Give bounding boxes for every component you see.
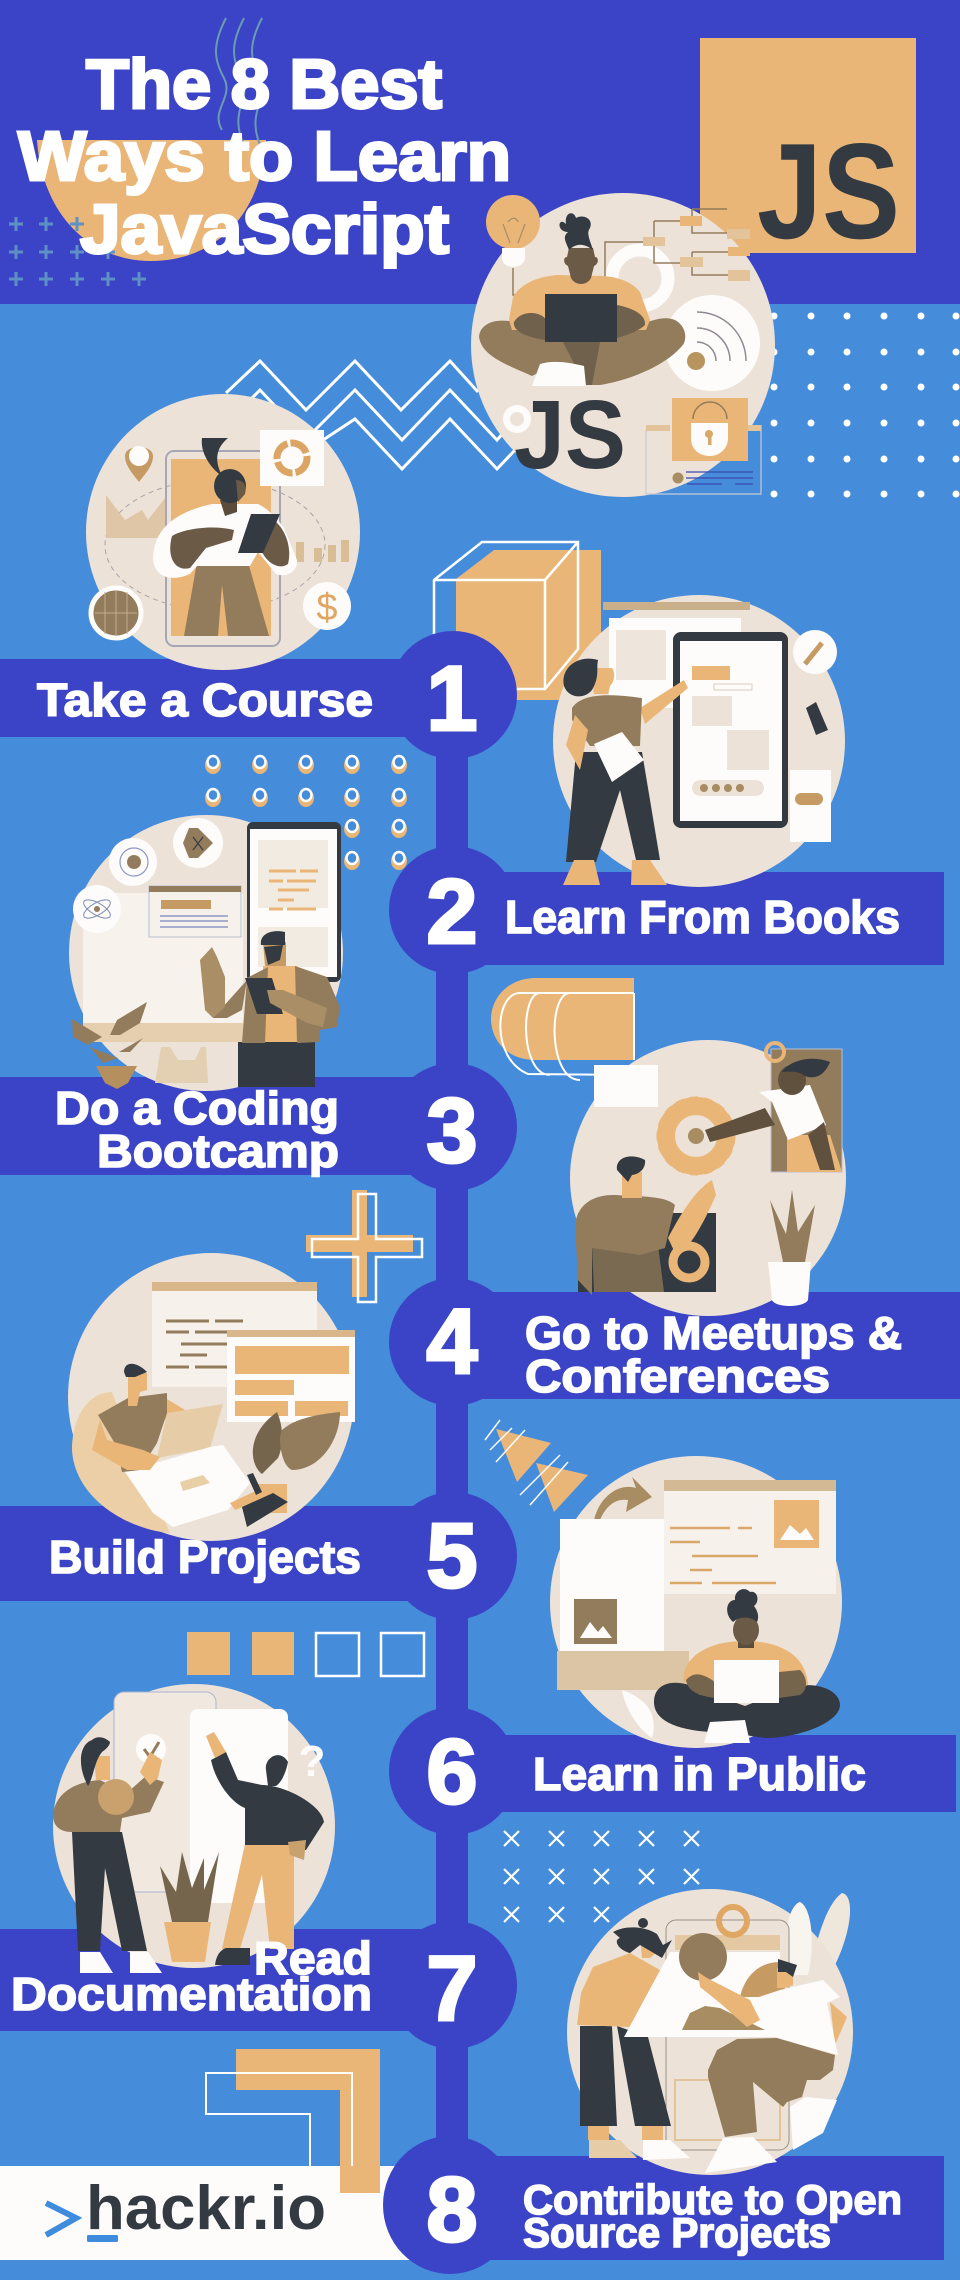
plant — [160, 1852, 219, 1962]
man head — [266, 1755, 288, 1786]
logo underline — [87, 2235, 118, 2242]
tan gear — [659, 1099, 733, 1173]
man hair top — [778, 1959, 797, 1977]
magnifier — [98, 1779, 134, 1815]
white feather — [785, 1902, 812, 1975]
label: Learn From Books: Learn From Books — [505, 891, 900, 943]
hatched band — [83, 1023, 243, 1042]
laptop — [157, 1404, 223, 1458]
backdrop circle — [570, 1040, 846, 1316]
label: Do a Coding Bootcamp — [55, 1082, 339, 1177]
arm — [640, 680, 688, 724]
backdrop circle — [69, 815, 343, 1091]
shirt — [98, 1393, 167, 1472]
shirt — [509, 275, 650, 330]
step 7 number badge: 7 — [426, 1938, 478, 2040]
woman head and hair — [81, 1737, 110, 1786]
label: Contribute to Open Source Projects — [523, 2176, 902, 2256]
photo tile — [574, 1599, 617, 1644]
woman trousers — [72, 1832, 147, 1951]
illustration: hero developer with laptop — [471, 193, 775, 497]
JS logo tile: JS — [757, 115, 900, 267]
jacket — [242, 966, 340, 1043]
wifi circle — [664, 295, 760, 391]
header band — [0, 0, 960, 304]
timeline vertical line — [436, 690, 468, 2210]
woman shoes — [589, 2140, 637, 2158]
decorative ringed dot grid — [205, 756, 407, 870]
phone contents — [692, 666, 823, 805]
small ring — [506, 408, 528, 430]
illustration: tan corner with white outline — [206, 2049, 380, 2193]
woman trousers — [580, 2026, 671, 2126]
lock tile — [672, 398, 748, 461]
white book — [532, 362, 586, 386]
man shirt — [750, 1980, 840, 2055]
front window — [227, 1330, 355, 1422]
frame — [771, 1049, 842, 1172]
tablet — [238, 514, 280, 553]
brown circle — [679, 1933, 727, 1981]
logo wordmark: hackr.io — [86, 2174, 326, 2243]
woman sweater — [53, 1776, 164, 1832]
man hand raised — [206, 1732, 226, 1758]
hero backdrop circle — [471, 193, 775, 497]
head and hair — [727, 1589, 759, 1648]
illustration: step 3 bootcamp — [69, 815, 343, 1091]
illustration: orange box — [434, 542, 601, 700]
raised forearm — [200, 947, 225, 1018]
step 5 number badge — [389, 1492, 517, 1620]
knee fold — [180, 1475, 210, 1491]
window — [149, 886, 241, 937]
label: Contribute to Open Source Projects: Contribute to Open — [523, 2176, 902, 2223]
woman lower body — [787, 1135, 842, 1172]
gear — [612, 250, 668, 306]
man sweater — [211, 1752, 324, 1850]
label: Read Documentation: Documentation — [11, 1968, 372, 2020]
basket — [155, 1047, 208, 1083]
step 3 label bar — [0, 1077, 450, 1175]
illustration: step 2 books — [553, 595, 845, 887]
donut tile — [260, 430, 324, 486]
step 3 number badge: 3 — [426, 1080, 478, 1182]
map pin — [125, 446, 153, 482]
flow chart — [605, 209, 750, 290]
laptop — [714, 1660, 779, 1703]
hatched shin — [563, 342, 600, 385]
step 3 number badge — [389, 1063, 517, 1191]
forearms — [686, 1670, 806, 1698]
white blob — [622, 1690, 654, 1738]
round icon badges — [73, 818, 223, 933]
woman head and hair — [613, 1918, 672, 1958]
hatched dome — [682, 2006, 765, 2030]
white document — [609, 618, 741, 708]
plant — [72, 1002, 147, 1089]
illustration: step 6 public — [550, 1456, 842, 1748]
decorative squares row — [187, 1632, 424, 1676]
hand — [140, 1752, 162, 1785]
ankles — [588, 2126, 663, 2140]
hatched armchair — [72, 1392, 170, 1533]
phone — [673, 632, 788, 828]
white dot grid — [770, 312, 960, 498]
phone frame — [166, 451, 280, 646]
forearm — [668, 1180, 716, 1255]
step 7 label bar — [0, 1929, 450, 2031]
man trousers — [222, 1844, 294, 1949]
decorative plus grid — [9, 217, 146, 286]
side panel — [790, 770, 831, 842]
step 7 number badge — [389, 1921, 517, 2049]
decorative cross grid — [504, 1831, 699, 1922]
shirt — [683, 1641, 808, 1695]
step 4 label bar — [450, 1292, 960, 1399]
logo white bar — [0, 2166, 410, 2260]
left window — [560, 1519, 664, 1651]
step 2 number badge — [389, 846, 517, 974]
label: Do a Coding Bootcamp: Do a Coding — [55, 1082, 339, 1134]
woman arm — [705, 1108, 775, 1142]
white panel — [190, 1709, 288, 1903]
globe — [91, 588, 141, 638]
illustration: step 7 documentation — [53, 1684, 335, 1973]
woman head and hair — [778, 1059, 830, 1095]
arrow — [594, 1477, 652, 1520]
gear on laptop — [673, 1246, 705, 1278]
dotted path — [105, 480, 325, 610]
feathers — [785, 1893, 850, 1975]
illustration: step 5 projects — [68, 1253, 355, 1541]
white trousers — [125, 1445, 250, 1527]
step 4 number badge — [389, 1278, 517, 1406]
price tag — [806, 702, 828, 735]
step 1 label bar — [0, 659, 450, 737]
white jacket — [153, 504, 297, 578]
logo chevron — [46, 2203, 76, 2235]
man trousers — [708, 2038, 835, 2137]
woman shirt — [759, 1085, 826, 1140]
shoulder — [165, 1399, 185, 1420]
backdrop circle — [567, 1889, 853, 2175]
label: Go to Meetups and Conferences: Go to Meetups & — [525, 1307, 902, 1359]
phone screen — [680, 641, 782, 821]
light bulb — [486, 195, 542, 295]
hackr.io logo — [46, 2174, 326, 2243]
upper arm — [213, 980, 247, 1018]
step 1 number badge — [389, 631, 517, 759]
backdrop blob — [68, 1253, 354, 1541]
bar chart — [296, 540, 349, 562]
monitor base — [557, 1651, 689, 1690]
head and hair — [563, 659, 614, 696]
step 5 label bar — [0, 1506, 450, 1601]
hatched forearms — [514, 305, 645, 340]
tan box — [258, 1484, 287, 1513]
hand — [267, 990, 327, 1027]
illustration: triangles — [485, 1420, 588, 1512]
paper — [704, 1720, 750, 1743]
head and hair — [202, 438, 246, 516]
backdrop circle — [86, 394, 360, 670]
dollar badge — [303, 582, 351, 630]
shirt — [572, 695, 642, 746]
label: Contribute to Open Source Projects: Source Projects — [523, 2209, 831, 2256]
label: Go to Meetups and Conferences: Conferences — [525, 1350, 830, 1402]
man arm — [698, 1972, 760, 2027]
crossed legs — [479, 318, 685, 385]
man elbow hand — [288, 1840, 306, 1860]
step 5 number badge: 5 — [426, 1505, 478, 1607]
step 8 label bar — [450, 2156, 944, 2260]
ankle — [230, 1490, 262, 1510]
step 6 label bar — [450, 1735, 956, 1812]
backdrop circle — [53, 1684, 335, 1968]
man head — [777, 1968, 793, 1988]
backdrop circle — [553, 595, 845, 887]
label: Take a Course: Take a Course — [37, 674, 373, 726]
decorative wavy lines — [216, 18, 263, 145]
step 6 number badge — [389, 1707, 517, 1835]
check badge — [136, 1734, 166, 1764]
shoes — [563, 860, 667, 885]
label: Read Documentation — [11, 1932, 372, 2020]
title: Ways to Learn — [18, 117, 511, 195]
illustration: step 8 open source — [567, 1889, 853, 2175]
back panel — [114, 1692, 216, 1892]
step 8 number badge: 8 — [426, 2159, 478, 2261]
JS logo tile — [700, 38, 916, 267]
illustration: step 1 course — [86, 394, 360, 670]
right window — [664, 1480, 836, 1594]
title: The 8 Best — [86, 45, 442, 123]
back window — [152, 1282, 317, 1387]
tablet — [594, 732, 644, 782]
step 2 label bar — [450, 872, 944, 965]
label: Do a Coding Bootcamp: Bootcamp — [97, 1125, 339, 1177]
hatched trousers — [592, 1245, 664, 1292]
step 2 number badge: 2 — [426, 861, 478, 963]
phone — [247, 822, 341, 982]
trousers — [238, 1042, 315, 1087]
phone outline — [666, 1920, 789, 2150]
lower arm — [566, 715, 588, 770]
title — [18, 45, 511, 268]
white zigzag lines — [226, 361, 515, 469]
step 8 number badge — [383, 2136, 517, 2274]
woman right arm — [808, 1122, 835, 1170]
pants — [184, 562, 269, 636]
area chart — [106, 495, 165, 538]
ring — [766, 1043, 784, 1061]
white card — [624, 1952, 780, 2037]
label: Go to Meetups and Conferences — [525, 1307, 902, 1402]
man hatched back — [740, 1962, 785, 1997]
decorative orange half circle — [37, 140, 266, 261]
arm — [92, 1420, 160, 1470]
gear ring — [719, 1907, 747, 1935]
shirt — [263, 966, 297, 1042]
man shoe — [215, 1948, 250, 1965]
label: Learn in Public: Learn in Public — [533, 1748, 866, 1800]
illustration: half cylinders — [491, 978, 634, 1080]
question mark: ? — [299, 1737, 325, 1786]
leaves — [253, 1412, 340, 1474]
wrench badge — [793, 630, 837, 674]
document panel outline — [646, 425, 761, 494]
hero JS letters: JS — [514, 380, 626, 489]
step 6 number badge: 6 — [426, 1721, 478, 1823]
man shirt — [575, 1195, 675, 1295]
dark crossed legs — [654, 1683, 840, 1738]
backdrop circle — [550, 1456, 842, 1748]
head and hair — [560, 213, 598, 284]
phone screen — [171, 459, 271, 636]
title: JavaScript — [80, 190, 449, 268]
browser bar — [603, 602, 750, 610]
head and cap — [124, 1364, 147, 1406]
laptop — [545, 294, 617, 342]
man head — [617, 1156, 645, 1198]
dollar badge: $ — [316, 587, 338, 629]
step 1 number badge: 1 — [426, 648, 478, 750]
plant — [768, 1190, 815, 1306]
white page — [83, 893, 243, 1023]
man shoes — [705, 2137, 777, 2173]
woman shirt — [577, 1953, 668, 2027]
dark shoe — [242, 1473, 288, 1527]
illustration: plus sign — [306, 1190, 422, 1302]
laptop — [578, 1213, 716, 1292]
trousers — [566, 752, 660, 862]
woman shoes — [80, 1952, 162, 1973]
step 4 number badge: 4 — [426, 1291, 478, 1393]
illustration: step 4 meetups — [570, 1040, 846, 1316]
small page — [616, 630, 666, 680]
tablet — [245, 978, 283, 1014]
label: Build Projects: Build Projects — [49, 1531, 361, 1583]
white window — [594, 1065, 658, 1107]
label: Read Documentation: Read — [254, 1932, 372, 1984]
forearms — [170, 520, 289, 569]
man hip — [830, 2002, 847, 2045]
head — [261, 931, 286, 966]
